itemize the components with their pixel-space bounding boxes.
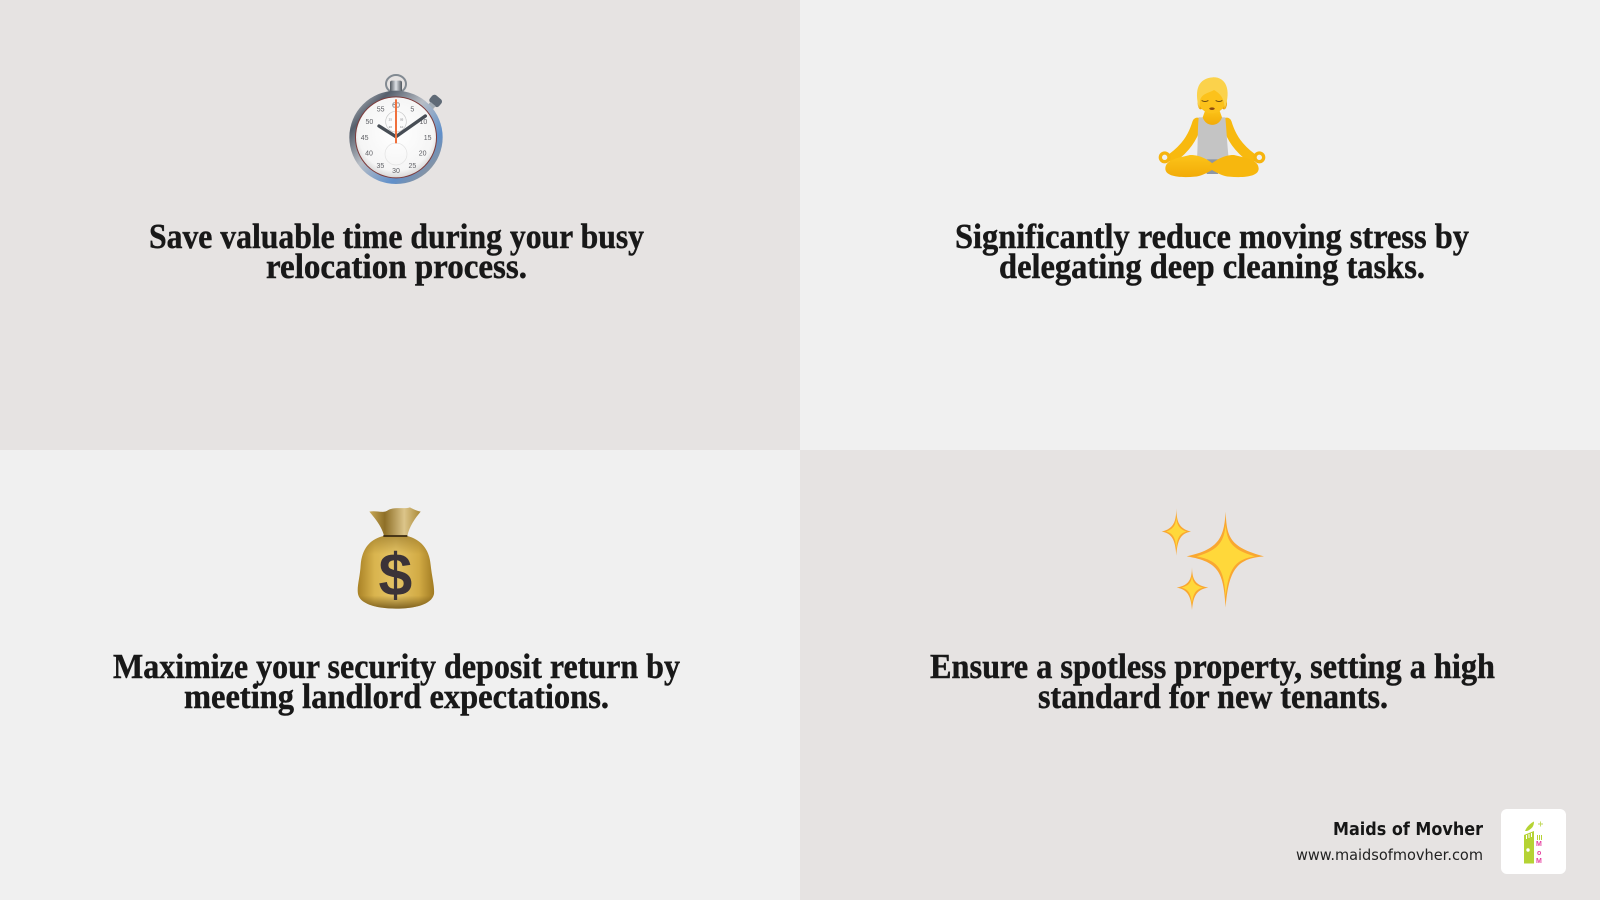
heading: reduce stress xyxy=(955,217,1469,286)
icon: stopwatch: 35 xyxy=(376,163,384,170)
heading: save time: relocation process. xyxy=(266,247,527,286)
logo: o xyxy=(1537,850,1541,857)
icon: stopwatch: 15 xyxy=(424,135,432,142)
heading: spotless property xyxy=(930,647,1495,716)
panel: reduce stress xyxy=(800,0,1600,450)
heading: security deposit: meeting landlord expectations. xyxy=(184,677,609,716)
icon: stopwatch: 25 xyxy=(408,163,416,170)
heading: reduce stress: delegating deep cleaning tasks. xyxy=(999,247,1425,286)
icon: stopwatch: 60 xyxy=(392,102,400,109)
heading: spotless property: standard for new tenants. xyxy=(1038,677,1388,716)
panel: security deposit xyxy=(0,450,800,900)
logo: M xyxy=(1536,858,1542,865)
heading: reduce stress: Significantly reduce moving stress by xyxy=(955,217,1469,256)
icon: stopwatch xyxy=(349,75,443,184)
website url: www.maidsofmovher.com xyxy=(1296,846,1483,864)
icon: person meditating xyxy=(1160,77,1264,177)
icon: stopwatch: 45 xyxy=(361,135,369,142)
panel: spotless property xyxy=(800,450,1600,900)
icon: stopwatch: 40 xyxy=(365,151,373,158)
heading: security deposit xyxy=(113,647,680,716)
logo: M xyxy=(1536,841,1542,848)
icon: stopwatch: 20 xyxy=(389,125,392,129)
icon: stopwatch: 10 xyxy=(400,125,404,129)
brand name: Maids of Movher xyxy=(1333,819,1483,840)
icon: stopwatch: 20 xyxy=(419,151,427,158)
heading: security deposit: Maximize your security deposit return by xyxy=(113,647,680,686)
icon: stopwatch: 05 xyxy=(400,117,404,121)
icon: sparkles xyxy=(1162,508,1264,610)
icon: money bag xyxy=(358,507,434,609)
heading: save time xyxy=(149,217,644,286)
icon: stopwatch: 55 xyxy=(377,107,385,114)
icon: stopwatch: 50 xyxy=(365,119,373,126)
icon: stopwatch: 5 xyxy=(410,107,414,114)
icon: stopwatch: 30 xyxy=(392,168,400,175)
icon: money bag: $ xyxy=(378,540,412,608)
heading: spotless property: Ensure a spotless property, setting a high xyxy=(930,647,1495,686)
icon: stopwatch: 10 xyxy=(419,119,427,126)
icon: stopwatch: 25 xyxy=(389,117,392,121)
panel: save time xyxy=(0,0,800,450)
logo xyxy=(1501,809,1566,874)
heading: save time: Save valuable time during your busy xyxy=(149,217,644,256)
brand footer xyxy=(1296,809,1566,874)
